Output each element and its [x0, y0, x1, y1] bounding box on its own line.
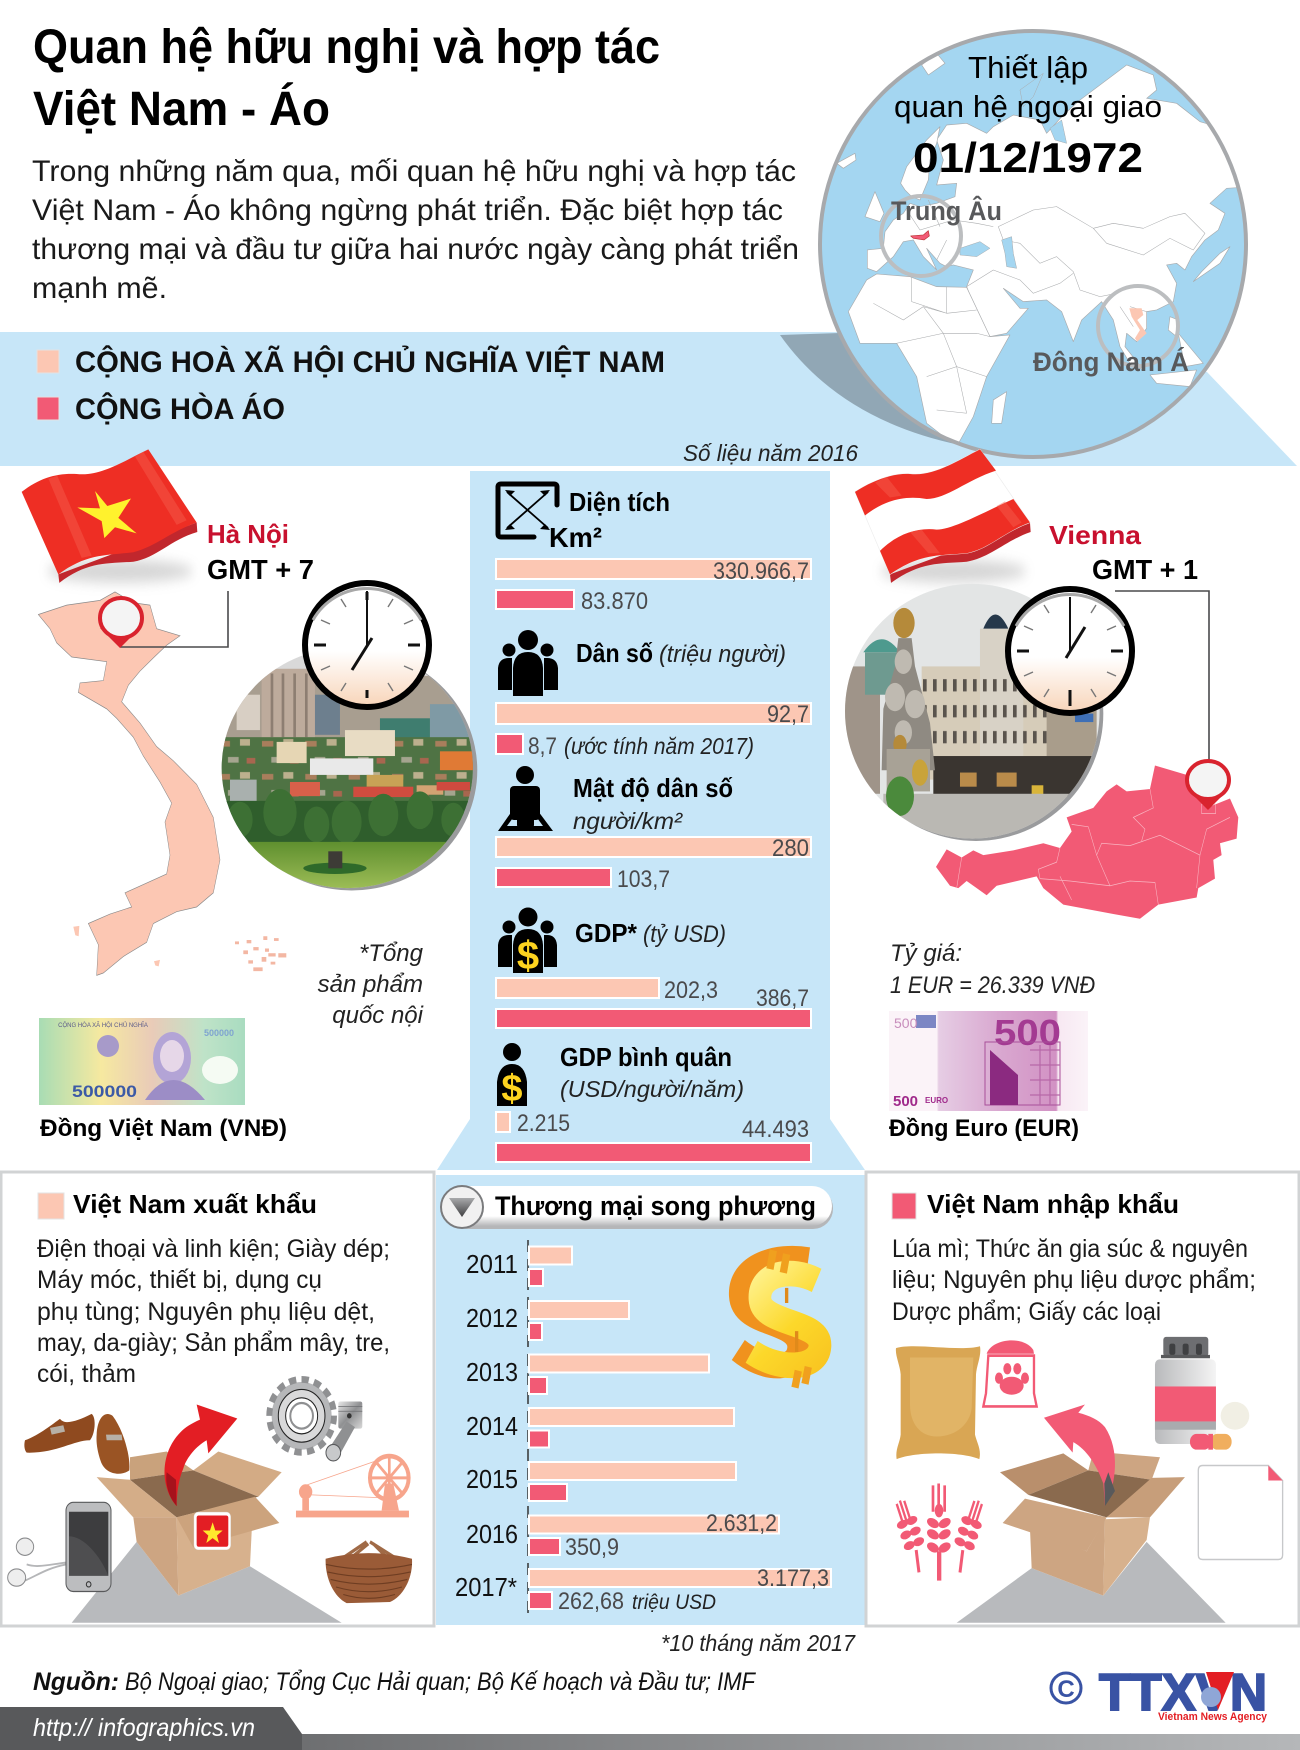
icon: wheat — [890, 1484, 989, 1581]
legend: Austria: CỘNG HÒA ÁO — [75, 392, 285, 426]
globe — [820, 31, 1263, 457]
trade bar chart: 2016 — [466, 1519, 518, 1549]
legend square: exports — [38, 1193, 64, 1219]
exports text: cói, thảm — [37, 1360, 136, 1388]
trade footnote: *10 tháng năm 2017 — [661, 1630, 856, 1656]
icon: paper sheet — [1198, 1465, 1283, 1560]
intro paragraph: thương mại và đầu tư giữa hai nước ngày càng phát triển — [32, 233, 799, 266]
indicator: area: Km² — [549, 522, 602, 553]
icon: people — [498, 630, 558, 696]
icon: pink arrow — [1044, 1405, 1115, 1506]
trade bar chart — [455, 1240, 831, 1616]
indicator: area — [496, 484, 811, 615]
clock: Hanoi time — [305, 583, 429, 707]
title — [33, 21, 660, 136]
trade bar chart: 2013 — [466, 1357, 518, 1387]
icon: GDP people with dollar: $ — [517, 934, 539, 978]
indicator: GDP per capita: 2.215 — [517, 1110, 570, 1137]
flag: Austria — [855, 449, 1031, 583]
label: GMT+7: GMT + 7 — [207, 554, 314, 585]
legend square: imports — [892, 1193, 916, 1219]
intro paragraph: mạnh mẽ. — [32, 272, 167, 305]
icon: pet food bag — [983, 1340, 1037, 1406]
icon: gold dollar — [738, 1250, 820, 1388]
footer bar — [0, 1707, 1300, 1750]
exports text — [37, 1235, 390, 1388]
trade bar chart: 2017* — [455, 1572, 517, 1602]
indicator: GDP per capita: (USD/người/năm) — [560, 1076, 744, 1102]
icon: cardboard box — [1000, 1452, 1185, 1596]
panel: bilateral trade — [436, 1175, 865, 1625]
banknote: EUR: EURO — [925, 1096, 948, 1105]
indicator: population: 92,7 — [767, 701, 809, 728]
icon: cardboard box — [97, 1452, 282, 1596]
trade bar chart: 2011 — [466, 1249, 518, 1279]
intro paragraph — [32, 155, 799, 305]
map: Vietnam — [38, 592, 286, 975]
exports heading: Việt Nam xuất khẩu — [73, 1189, 317, 1219]
pin: Hanoi — [100, 598, 142, 648]
banknote: VND: 500000 — [72, 1082, 137, 1101]
banknote: VND: 500000 — [204, 1028, 234, 1038]
trade bar chart: triệu USD — [632, 1591, 716, 1614]
photo: Vienna — [843, 582, 1103, 843]
banknote: EUR: 500 — [994, 1012, 1061, 1053]
panel: Austria profile — [843, 449, 1238, 1142]
diplomatic relation date: Thiết lập — [968, 50, 1088, 85]
footer bar: http:// infographics.vn — [33, 1714, 255, 1742]
exchange rate: Tỷ giá: — [890, 940, 962, 967]
legend: Vietnam: CỘNG HOÀ XÃ HỘI CHỦ NGHĨA VIỆT NAM — [75, 345, 665, 379]
exports text: may, da-giày; Sản phẩm mây, tre, — [37, 1329, 390, 1357]
icon: red arrow — [165, 1405, 237, 1506]
region circle: Southeast Asia — [1098, 286, 1178, 366]
icon: person with dollar — [497, 1043, 527, 1110]
indicator: population density: 103,7 — [617, 866, 670, 893]
title: Quan hệ hữu nghị và hợp tác — [33, 21, 660, 74]
legend banner — [0, 332, 1297, 466]
icon: area — [498, 484, 557, 537]
banknote: EUR — [889, 1011, 1088, 1111]
GDP footnote — [318, 940, 424, 1029]
flag: Vietnam — [22, 449, 197, 583]
panel: Vietnam exports — [1, 1172, 434, 1626]
map: Austria — [936, 765, 1238, 919]
banknote: EUR: 500 — [894, 1015, 918, 1031]
indicator: GDP: 386,7 — [756, 985, 809, 1012]
imports text — [892, 1235, 1256, 1326]
indicator: GDP: (tỷ USD) — [643, 921, 726, 948]
label: Trung Âu: Trung Âu — [891, 195, 1002, 226]
label: GMT+1: GMT + 1 — [1092, 554, 1198, 585]
trade bar chart: 2.631,2 — [706, 1510, 777, 1537]
banknote: VND: CỘNG HÒA XÃ HỘI CHỦ NGHĨA — [58, 1022, 148, 1029]
indicator: GDP: GDP* — [575, 918, 638, 948]
trade bar chart: 2014 — [466, 1411, 518, 1441]
connector line: Vienna — [1115, 591, 1209, 761]
diplomatic relation date: 01/12/1972 — [913, 134, 1143, 181]
diplomatic relation date: quan hệ ngoại giao — [894, 89, 1162, 124]
exports text: phụ tùng; Nguyên phụ liệu dệt, — [37, 1298, 375, 1326]
indicator: GDP: 202,3 — [664, 977, 718, 1004]
icon: wicker basket — [326, 1542, 412, 1603]
panel: comparison indicators — [437, 471, 865, 1170]
trade bar chart: 3.177,3 — [757, 1565, 829, 1592]
imports text: liệu; Nguyên phụ liệu dược phẩm; — [892, 1266, 1256, 1294]
indicator: population: Dân số — [576, 638, 653, 668]
title: Việt Nam - Áo — [33, 82, 330, 136]
icon: density — [498, 766, 553, 831]
indicator: population density: Mật độ dân số — [573, 773, 733, 803]
icon: phone and earphones — [8, 1502, 111, 1592]
logo: TTXVN: TTXVN — [1099, 1664, 1267, 1722]
indicator: area: Diện tích — [569, 487, 670, 517]
indicator: population density: người/km² — [573, 808, 683, 834]
icon: flag sticker — [194, 1512, 231, 1550]
imports text: Dược phẩm; Giấy các loại — [892, 1298, 1161, 1326]
panel: Vietnam profile — [22, 449, 477, 1142]
photo: Hanoi — [220, 643, 477, 894]
exchange rate — [890, 940, 1095, 999]
GDP footnote: quốc nội — [332, 1002, 424, 1029]
exports text: Điện thoại và linh kiện; Giày dép; — [37, 1235, 390, 1263]
region circle: Central Europe — [881, 196, 961, 276]
logo: TTXVN: C — [1057, 1676, 1075, 1703]
GDP footnote: *Tổng — [359, 940, 424, 967]
indicator: area: 83.870 — [581, 588, 648, 615]
clock: Vienna time — [1008, 589, 1132, 713]
indicator: population density: 280 — [772, 835, 809, 862]
source: Bộ Ngoại giao; Tổng Cục Hải quan; Bộ Kế hoạch và Đầu tư; IMF — [125, 1668, 757, 1696]
indicator: area: 330.966,7 — [713, 558, 809, 585]
intro paragraph: Trong những năm qua, mối quan hệ hữu nghị và hợp tác — [32, 155, 796, 188]
icon: medicine bottle and pills — [1155, 1337, 1249, 1450]
banknote: VND — [39, 1018, 245, 1105]
exchange rate: 1 EUR = 26.339 VNĐ — [890, 972, 1095, 999]
icon: person with dollar: $ — [501, 1068, 523, 1110]
indicator: GDP per capita: GDP bình quân — [560, 1042, 732, 1072]
intro paragraph: Việt Nam - Áo không ngừng phát triển. Đặc biệt hợp tác — [32, 194, 783, 227]
currency label: VND: Đồng Việt Nam (VNĐ) — [40, 1115, 287, 1142]
label: Vienna: Vienna — [1049, 520, 1142, 550]
indicator: GDP per capita: 44.493 — [742, 1116, 809, 1143]
floor shadow: imports — [957, 1542, 1226, 1623]
icon: spinning wheel — [296, 1456, 409, 1517]
icon: shoes — [24, 1414, 129, 1474]
GDP footnote: sản phẩm — [318, 971, 423, 998]
world map — [837, 53, 1263, 447]
banknote: EUR: 500 — [893, 1093, 918, 1110]
logo: TTXVN: Vietnam News Agency — [1158, 1711, 1268, 1723]
indicator: GDP — [496, 908, 811, 1028]
source: Nguồn: — [33, 1668, 119, 1696]
indicator: population: (triệu người) — [659, 641, 786, 668]
connector line: Hanoi — [120, 591, 228, 647]
icon: GDP people with dollar — [498, 908, 557, 978]
imports text: Lúa mì; Thức ăn gia súc & nguyên — [892, 1235, 1248, 1263]
exports text: Máy móc, thiết bị, dụng cụ — [37, 1266, 322, 1294]
trade bar chart: 350,9 — [565, 1534, 619, 1561]
label: Đông Nam Á: Đông Nam Á — [1033, 346, 1189, 377]
icon: gear and piston — [269, 1379, 362, 1461]
indicator: population — [496, 630, 811, 760]
panel: Vietnam imports — [866, 1172, 1299, 1626]
trade heading pill: Thương mại song phương — [495, 1191, 816, 1221]
indicator: population: (ước tính năm 2017) — [564, 733, 754, 759]
diplomatic relation date — [894, 50, 1162, 181]
trade bar chart: 2012 — [466, 1303, 518, 1333]
imports heading: Việt Nam nhập khẩu — [927, 1189, 1179, 1219]
trade bar chart: 2015 — [466, 1464, 518, 1494]
label: Hanoi: Hà Nội — [207, 519, 289, 549]
data year note: Số liệu năm 2016 — [683, 440, 858, 466]
trade heading pill — [441, 1186, 833, 1229]
trade bar chart: 262,68 — [558, 1588, 624, 1615]
indicator: GDP per capita — [496, 1042, 811, 1162]
indicator: population density — [496, 766, 811, 893]
pin: Vienna — [1187, 761, 1229, 810]
icon: grain sack — [896, 1346, 980, 1459]
currency label: EUR: Đồng Euro (EUR) — [889, 1115, 1079, 1142]
floor shadow: exports — [72, 1542, 342, 1623]
indicator: population: 8,7 — [528, 733, 557, 760]
